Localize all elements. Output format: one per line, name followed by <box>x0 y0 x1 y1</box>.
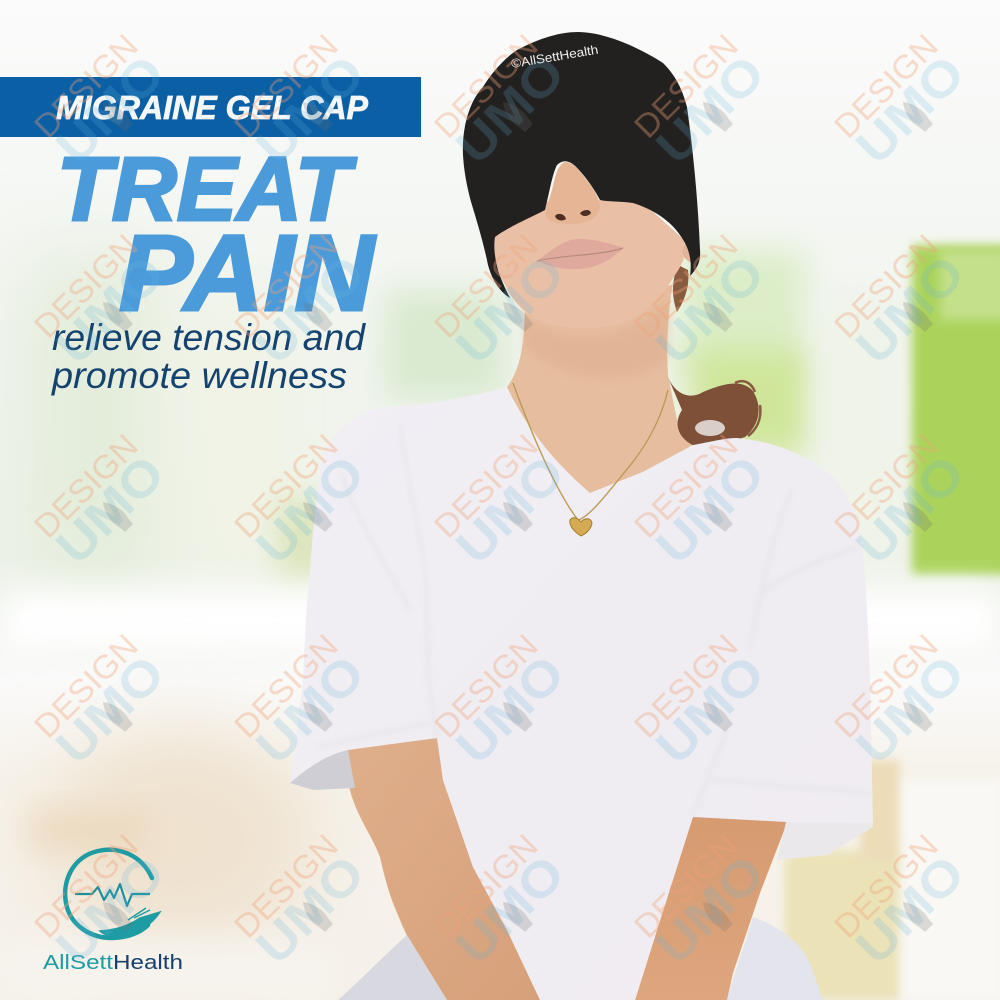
short hair behind ear <box>673 265 688 312</box>
brand logo <box>43 850 183 974</box>
watermark pattern: UMO <box>245 445 375 575</box>
watermark pattern: UMO <box>245 45 375 175</box>
banner <box>0 77 421 137</box>
necklace <box>513 383 668 520</box>
face <box>494 200 685 328</box>
watermark pattern: DESIGN <box>427 827 545 945</box>
watermark pattern: DESIGN <box>627 627 745 745</box>
watermark pattern: UMO <box>45 845 175 975</box>
watermark pattern: UMO <box>645 645 775 775</box>
ear <box>682 242 694 262</box>
shirt hem left: underside <box>290 750 355 790</box>
watermark pattern: DESIGN <box>627 427 745 545</box>
watermark pattern: DESIGN <box>27 27 145 145</box>
watermark pattern: UMO <box>645 45 775 175</box>
watermark pattern: UMO <box>445 245 575 375</box>
shirt hem right: underside <box>777 818 873 860</box>
watermark pattern: UMO <box>445 845 575 975</box>
shirt folds and seams <box>317 423 872 815</box>
watermark pattern: DESIGN <box>427 427 545 545</box>
watermark pattern: DESIGN <box>627 27 745 145</box>
watermark pattern: UMO <box>845 45 975 175</box>
watermark pattern: UMO <box>445 645 575 775</box>
watermark pattern: UMO <box>45 645 175 775</box>
headline: treat pain <box>57 140 376 333</box>
shirt bottom left <box>338 935 447 1000</box>
watermark pattern: DESIGN <box>227 427 345 545</box>
subheading: relieve tension and <box>52 317 366 358</box>
watermark pattern: DESIGN <box>627 227 745 345</box>
watermark pattern: DESIGN <box>427 627 545 745</box>
watermark pattern: DESIGN <box>827 27 945 145</box>
watermark pattern: DESIGN <box>427 227 545 345</box>
under-chin shadow <box>524 300 670 377</box>
watermark pattern: UMO <box>45 445 175 575</box>
watermark pattern: UMO <box>45 245 175 375</box>
watermark pattern: UMO <box>645 245 775 375</box>
watermark pattern: DESIGN <box>827 427 945 545</box>
subheading: promote wellness <box>51 355 347 396</box>
watermark pattern: DESIGN <box>827 227 945 345</box>
heartbeat line <box>75 884 150 906</box>
heart pendant <box>570 518 592 536</box>
watermark pattern: DESIGN <box>27 627 145 745</box>
arm: right <box>635 810 790 1000</box>
watermark pattern: DESIGN <box>427 27 545 145</box>
watermark pattern: UMO <box>45 45 175 175</box>
white t-shirt <box>290 387 873 1000</box>
watermark pattern: DESIGN <box>27 227 145 345</box>
lip line <box>537 248 623 261</box>
watermark pattern: DESIGN <box>227 227 345 345</box>
watermark pattern: UMO <box>645 445 775 575</box>
watermark pattern: UMO <box>845 645 975 775</box>
hair curl <box>667 375 760 447</box>
nostrils <box>555 210 591 220</box>
black gel cap <box>463 32 700 298</box>
logo wordmark: AllSett Health <box>43 951 183 974</box>
logo ring <box>65 850 152 938</box>
watermark pattern: DESIGN <box>227 627 345 745</box>
subheading <box>51 317 366 396</box>
headline: treat pain: TREAT <box>57 140 357 240</box>
neck and chest <box>507 285 693 493</box>
watermark pattern: UMO <box>445 45 575 175</box>
watermark pattern: DESIGN <box>227 27 345 145</box>
shirt bottom right <box>727 917 823 1000</box>
watermark pattern: DESIGN <box>827 827 945 945</box>
lips <box>537 239 624 269</box>
watermark pattern: UMO <box>645 845 775 975</box>
cap brand text: ©AllSettHealth <box>510 43 599 71</box>
watermark pattern: UMO <box>245 245 375 375</box>
watermark pattern: UMO <box>845 845 975 975</box>
caring hand <box>100 908 160 938</box>
watermark pattern: UMO <box>845 245 975 375</box>
watermark pattern: UMO <box>245 645 375 775</box>
nose <box>546 162 600 224</box>
banner heading: MIGRAINE GEL CAP <box>56 89 369 126</box>
watermark pattern: DESIGN <box>27 427 145 545</box>
watermark pattern: DESIGN <box>227 827 345 945</box>
watermark pattern: DESIGN <box>627 827 745 945</box>
watermark pattern: UMO <box>445 445 575 575</box>
person <box>290 32 873 1000</box>
headline: treat pain: PAIN <box>119 212 376 333</box>
watermark pattern: DESIGN <box>827 627 945 745</box>
arm: left <box>345 730 540 1000</box>
watermark pattern: UMO <box>845 445 975 575</box>
watermark pattern: UMO <box>245 845 375 975</box>
watermark pattern: DESIGN <box>27 827 145 945</box>
